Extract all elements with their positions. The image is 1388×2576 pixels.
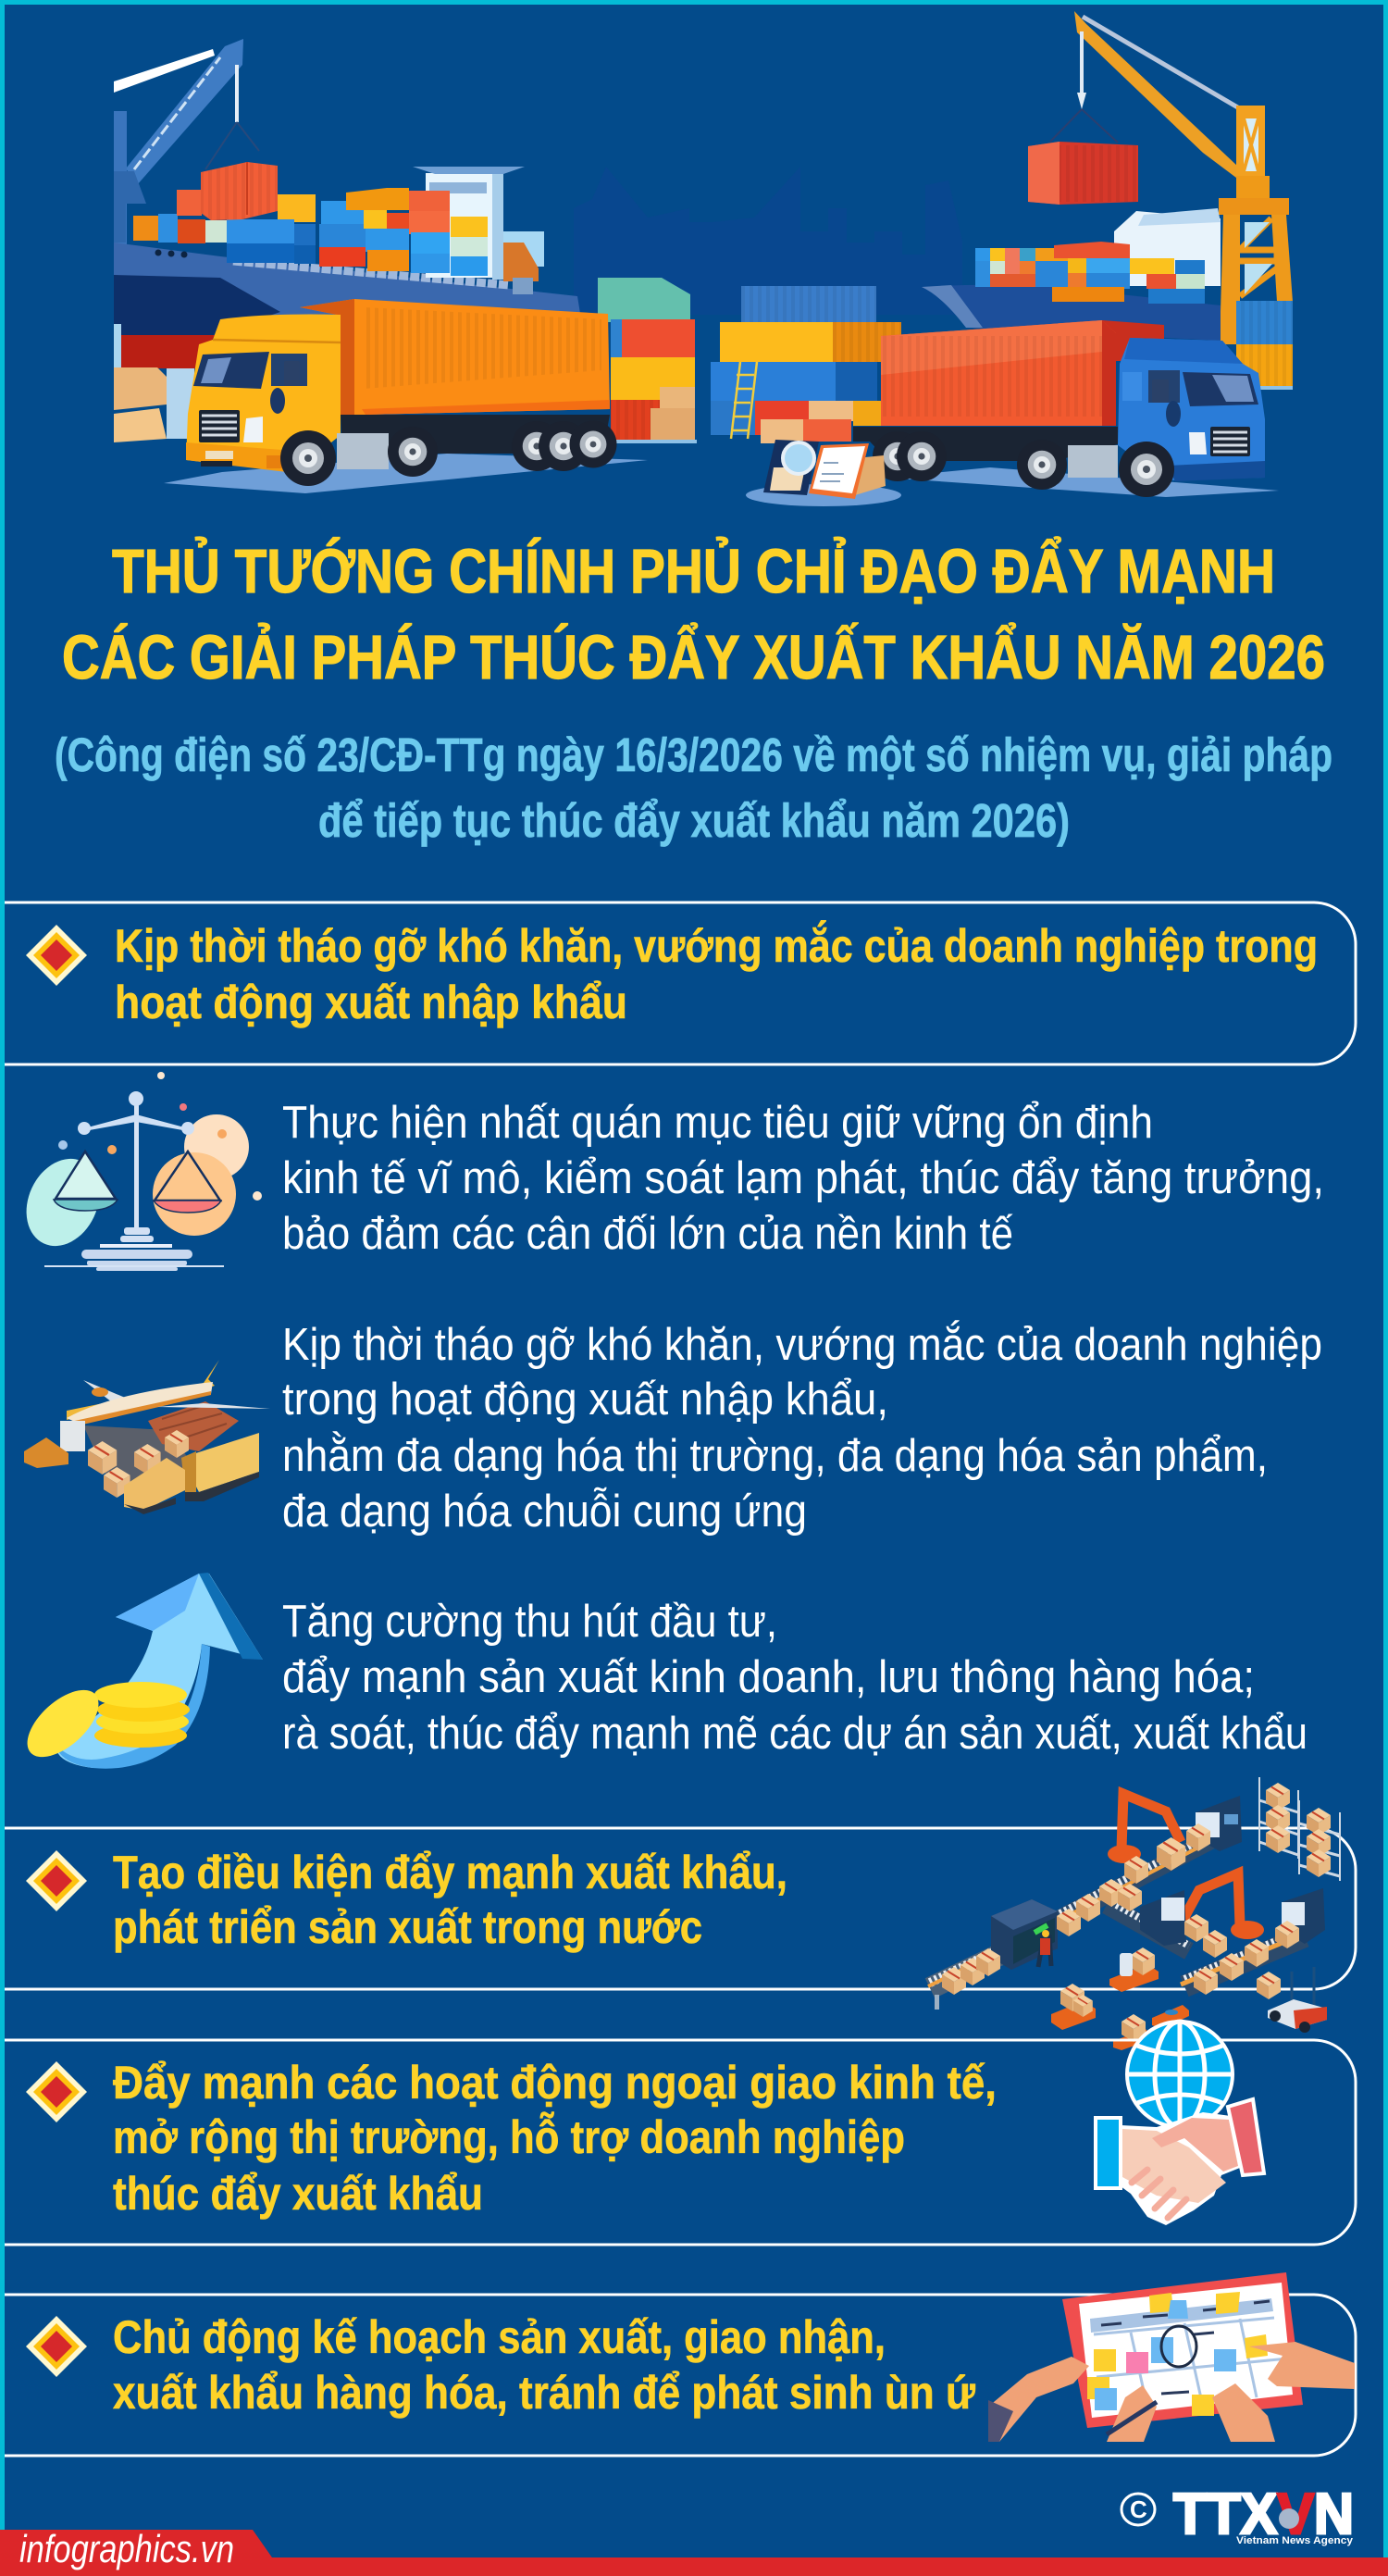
text block 3: đẩy mạnh sản xuất kinh doanh, lưu thông hàng hóa;: [282, 1652, 1255, 1702]
heading 2 text: Tạo điều kiện đẩy mạnh xuất khẩu,: [113, 1847, 787, 1898]
icon: air plane and cargo: [24, 1360, 270, 1514]
subtitle: để tiếp tục thúc đẩy xuất khẩu năm 2026): [318, 794, 1070, 847]
clipboard and magnifier: [763, 440, 886, 499]
middle containers: [598, 278, 697, 443]
heading 3 text: thúc đẩy xuất khẩu: [113, 2168, 483, 2220]
yellow truck: [186, 299, 616, 486]
text block 1: Thực hiện nhất quán mục tiêu giữ vững ổn định: [282, 1098, 1153, 1148]
left ship bridge: [413, 167, 544, 294]
heading 4 text: [113, 2311, 976, 2419]
heading 2 text: [113, 1847, 787, 1953]
title: [62, 537, 1325, 692]
panel: heading 1: [5, 902, 1356, 1064]
hanging container left: [201, 162, 278, 220]
control station: [991, 1899, 1058, 1970]
icon: balance scale: [13, 1072, 262, 1271]
icon: planning board with hands: [988, 2272, 1355, 2442]
icon: rising arrow and coins: [16, 1573, 263, 1769]
right ship containers: [975, 242, 1205, 304]
illustration: port with trucks: [114, 11, 1293, 506]
parcels: [942, 1823, 1299, 1995]
text block 2: [282, 1320, 1322, 1537]
robot arms: [1108, 1794, 1264, 1939]
right stacked containers: [711, 286, 901, 443]
city silhouette: [574, 167, 962, 315]
text block 1: [282, 1098, 1324, 1259]
heading 3 text: [113, 2057, 997, 2220]
text block 2: nhằm đa dạng hóa thị trường, đa dạng hóa sản phẩm,: [282, 1431, 1268, 1481]
panel: heading 4: [5, 2295, 1356, 2456]
logo: copyright and TTXVN: Vietnam News Agency: [1236, 2535, 1354, 2546]
text block 3: Tăng cường thu hút đầu tư,: [282, 1597, 777, 1647]
site name: infographics.vn: [19, 2527, 234, 2570]
left cardboard boxes: [114, 367, 167, 442]
tunnels: [1140, 1796, 1325, 1946]
heading 4 text: Chủ động kế hoạch sản xuất, giao nhận,: [113, 2311, 886, 2363]
heading 1 text: hoạt động xuất nhập khẩu: [115, 977, 627, 1028]
left ship containers: [133, 188, 488, 276]
heading 3 text: Đẩy mạnh các hoạt động ngoại giao kinh tế,: [113, 2057, 997, 2109]
text block 2: đa dạng hóa chuỗi cung ứng: [282, 1487, 807, 1537]
containers beside crane: [1236, 301, 1293, 390]
hanging container right: [1028, 142, 1138, 205]
logo: copyright and TTXVN: C: [1130, 2495, 1147, 2523]
text block 3: [282, 1597, 1307, 1759]
text block 1: kinh tế vĩ mô, kiểm soát lạm phát, thúc đẩy tăng trưởng,: [282, 1153, 1324, 1203]
icon: diamond 3: [26, 2061, 87, 2122]
icon: diamond 4: [26, 2316, 87, 2377]
icon: diamond 2: [26, 1850, 87, 1911]
icon: automated factory line: [928, 1777, 1340, 2050]
panel: heading 3: [5, 2040, 1356, 2245]
right crane: [1050, 11, 1293, 344]
conveyor belts: [928, 1831, 1305, 2010]
warehouse shelves: [1259, 1777, 1340, 1881]
icon: diamond 1: [26, 925, 87, 986]
icon: globe and handshake: [1096, 2022, 1264, 2225]
text block 1: bảo đảm các cân đối lớn của nền kinh tế: [282, 1209, 1013, 1259]
truck shadows: [164, 454, 1279, 506]
right ship: [922, 208, 1221, 341]
heading 1 text: [115, 920, 1318, 1028]
panel: heading 2: [5, 1828, 1356, 1989]
left ship hull: [114, 243, 581, 439]
logo: copyright and TTXVN: TTXVN: [1173, 2483, 1354, 2546]
blue truck: [853, 320, 1265, 497]
left crane: [114, 39, 259, 245]
forklift: [1257, 1967, 1327, 2033]
heading 3 text: mở rộng thị trường, hỗ trợ doanh nghiệp: [113, 2111, 905, 2163]
footer ribbon: [0, 2527, 1388, 2576]
text block 2: trong hoạt động xuất nhập khẩu,: [282, 1375, 888, 1425]
subtitle: [55, 728, 1332, 847]
heading 2 text: phát triển sản xuất trong nước: [113, 1901, 702, 1953]
AGV robots: [1051, 1948, 1189, 2050]
heading 4 text: xuất khẩu hàng hóa, tránh để phát sinh ùn ứ: [113, 2367, 976, 2419]
